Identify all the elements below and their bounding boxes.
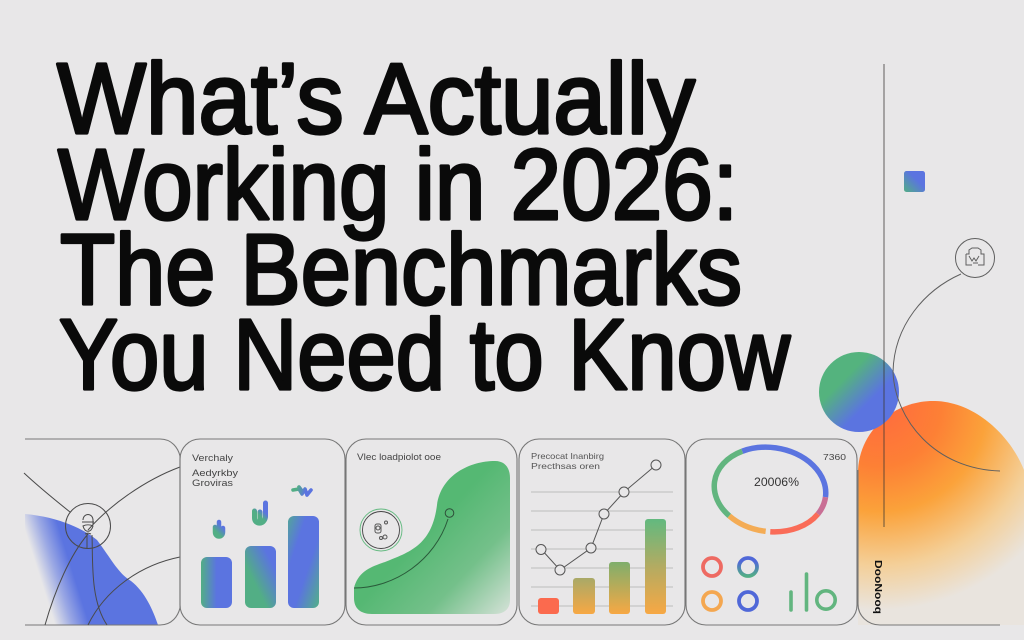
panel 4: line and bar chart: [519, 439, 685, 625]
line series: [536, 460, 661, 575]
title: Working in 2026:: [58, 129, 738, 241]
blue shape: [25, 514, 158, 625]
grid lines: [531, 492, 673, 606]
panel outline: [180, 439, 345, 625]
title: The Benchmarks: [60, 214, 742, 326]
panel outline: [346, 439, 517, 625]
panel text: Precocat Inanbirg: [531, 451, 604, 461]
green-blue circle: [819, 352, 899, 432]
square accent: [904, 171, 925, 192]
curve node: [445, 509, 454, 517]
title: [57, 43, 791, 411]
curve line: [354, 519, 448, 588]
vertical label: DooNooq: [872, 560, 884, 614]
title: You Need to Know: [59, 299, 791, 411]
panel 3: green area chart: [346, 439, 517, 625]
panel outline: [519, 439, 685, 625]
corner value: 7360: [823, 452, 846, 462]
panel text: Aedyrkby: [192, 468, 238, 479]
panel text: Vlec loadpiolot ooe: [357, 452, 441, 463]
panel text: Precthsas oren: [531, 461, 600, 471]
connector curve with node icon: [893, 238, 1000, 471]
bars: [538, 598, 559, 614]
panel text: [192, 453, 238, 489]
icon: badge: [360, 509, 402, 551]
panel 5: donut and rings: [686, 439, 857, 625]
mini bars and circle: [791, 574, 835, 610]
connector lines: [24, 467, 180, 625]
panel text: Verchaly: [192, 453, 233, 464]
icon: person in circle: [66, 504, 110, 548]
bar icons: [215, 487, 311, 536]
icon: node glyph: [956, 238, 994, 278]
panel outline: [686, 439, 857, 625]
panel text: Groviras: [192, 478, 233, 489]
vertical line: [883, 64, 885, 527]
panel 6: bottom line and vertical label: [858, 470, 1000, 625]
orange shape: [858, 401, 1024, 625]
panel outline: [25, 439, 180, 625]
panel 2: growth bars: [180, 439, 345, 625]
panel text: [531, 451, 604, 471]
donut label: 20006%: [754, 477, 799, 489]
panel 1: person node: [24, 439, 180, 625]
bars: [201, 557, 232, 608]
green area: [354, 461, 510, 614]
donut ring: [709, 440, 831, 539]
title: What’s Actually: [57, 43, 695, 155]
small rings: [703, 558, 757, 610]
